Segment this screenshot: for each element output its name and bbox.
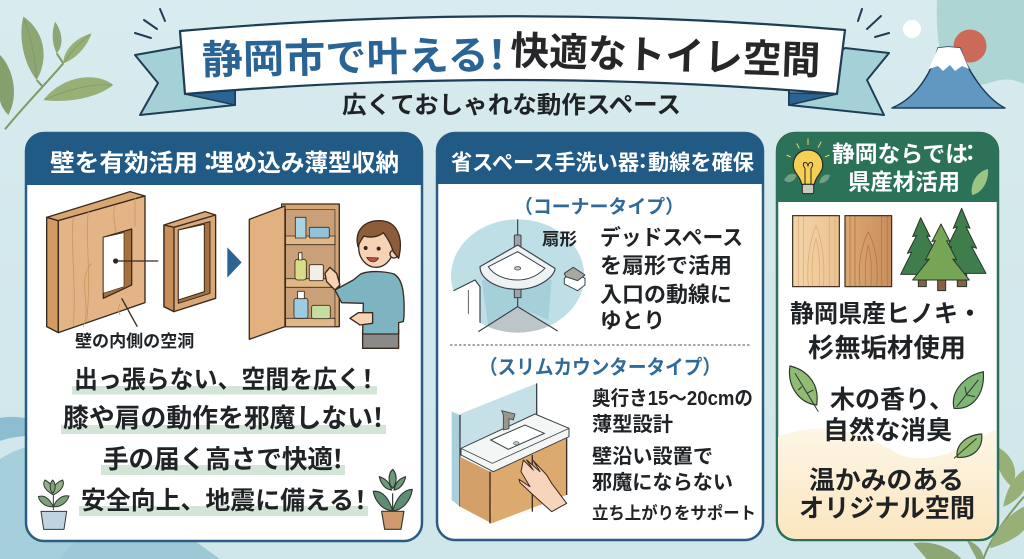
bullet list: wall storage benefits: ！ [365, 403, 391, 433]
panel header: ： [632, 150, 654, 174]
panel header [26, 133, 422, 185]
text: wood scent: 自然な消臭 [823, 417, 952, 445]
bullet list: wall storage benefits: 膝や肩の動作を邪魔しない [63, 403, 373, 433]
hinoki sample [793, 216, 839, 287]
title text: ！ [477, 34, 517, 78]
text: warm original space: オリジナル空間 [799, 495, 975, 523]
text: slim counter benefits: 奥行き15〜20cmの [592, 387, 753, 410]
panel header: 壁を有効活用 [50, 150, 198, 177]
illustration: corner basin [445, 219, 585, 337]
icon: trees [901, 208, 986, 291]
illustration: slim counter basin [452, 383, 569, 523]
text: slim counter benefits: 薄型設計 [592, 413, 673, 436]
text: corner type benefits: デッドスペース [600, 225, 743, 250]
text: corner type benefits: ゆとり [600, 309, 665, 333]
panel header: 省スペース手洗い器 [451, 151, 639, 175]
text: slim counter benefits: 立ち上がりをサポート [592, 503, 756, 523]
text: corner type benefits [600, 225, 743, 333]
icon: leaf upper right [953, 372, 983, 408]
decorative tea leaves, top left [0, 17, 113, 129]
icon: person [325, 221, 404, 348]
bullet list: wall storage benefits: 出っ張らない、空間を広く [74, 366, 361, 394]
icon: leaf lower right [954, 434, 982, 458]
panel: local materials [777, 133, 998, 540]
panel header: ： [959, 141, 982, 166]
icon: wooden wall with cavity [47, 192, 158, 333]
mount fuji with sun [892, 20, 1005, 108]
bullet list: wall storage benefits: ！ [325, 446, 351, 474]
decorative tea leaves, bottom right [913, 447, 1024, 559]
subheading: corner type: （コーナータイプ） [514, 196, 684, 218]
text: slim counter benefits: 壁沿い設置で [592, 445, 713, 468]
text: wood scent: 木の香り、 [830, 386, 954, 414]
panel header [437, 133, 763, 184]
icon: light bulb [784, 138, 830, 194]
icon: leaf in header [972, 169, 988, 195]
title text: 静岡市で叶える [201, 34, 489, 83]
icon: leaf upper left [789, 366, 818, 412]
icon: storage frame [164, 212, 216, 312]
bullet list: wall storage benefits: ！ [355, 366, 380, 394]
title text: 快適なトイレ空間 [510, 30, 821, 83]
bullet list: wall storage benefits [61, 366, 391, 516]
arrow [227, 247, 242, 278]
wood samples [793, 216, 892, 287]
title banner [135, 9, 889, 115]
text: wood scent [823, 386, 954, 445]
label: fan shape: 扇形 [542, 230, 577, 249]
icon: open cabinet [249, 204, 339, 339]
panel header [777, 133, 998, 202]
text: slim counter benefits: 邪魔にならない [592, 471, 733, 494]
text: local cypress and cedar: 杉無垢材使用 [808, 333, 966, 363]
icon: large potted plant [373, 469, 412, 529]
text: warm original space: 温かみのある [809, 467, 964, 495]
text: local cypress and cedar [790, 300, 982, 363]
panel: space-saving hand basin [437, 133, 763, 540]
text: corner type benefits: を扇形で活用 [600, 254, 732, 278]
icon: small potted plant [38, 480, 69, 529]
panel header: 埋め込み薄型収納 [210, 150, 399, 177]
panel: wall storage [26, 133, 422, 541]
panel header: 動線を確保 [648, 151, 754, 175]
subheading: slim counter type: （スリムカウンタータイプ） [479, 356, 721, 379]
title text [201, 30, 821, 83]
illustration: wall, frame, cabinet and person [47, 192, 404, 351]
panel header: 県産材活用 [848, 170, 960, 195]
cedar sample [845, 216, 892, 287]
panel header: ： [196, 149, 220, 176]
emphasis ticks [135, 9, 889, 38]
panel header: 静岡ならでは [832, 142, 968, 167]
text: warm original space [799, 467, 975, 523]
subtitle: 広くておしゃれな動作スペース [342, 92, 681, 119]
bullet list: wall storage benefits: 手の届く高さで快適 [103, 446, 333, 474]
text: local cypress and cedar: 静岡県産ヒノキ・ [790, 300, 982, 328]
text: slim counter benefits [592, 387, 756, 523]
text: corner type benefits: 入口の動線に [600, 283, 732, 307]
bullet list: wall storage benefits: 安全向上、地震に備える [81, 487, 354, 515]
bullet list: wall storage benefits: ！ [348, 487, 373, 515]
label: wall cavity: 壁の内側の空洞 [75, 332, 194, 351]
